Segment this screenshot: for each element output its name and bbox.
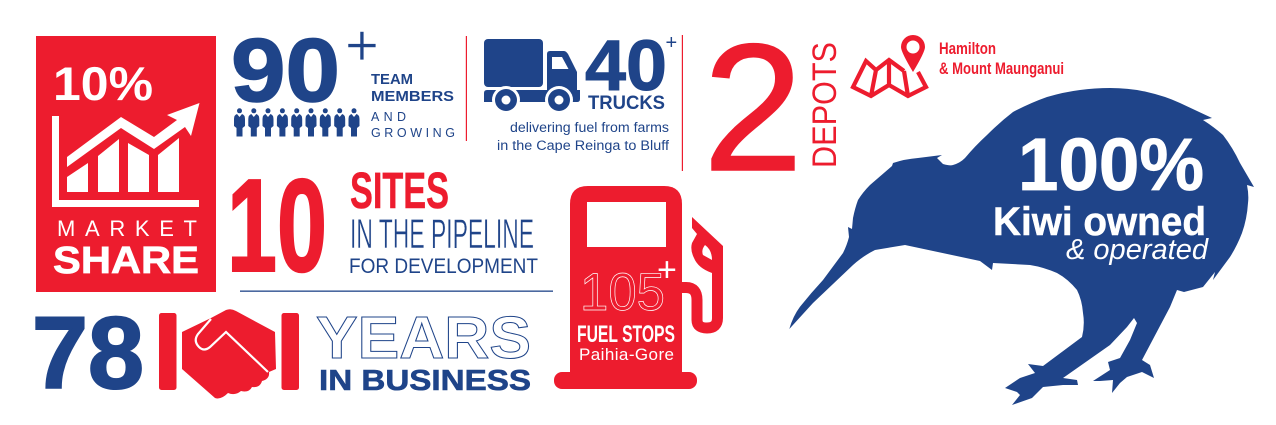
in business label: IN BUSINESS: [319, 365, 531, 397]
fuel stops label: FUEL STOPS: [577, 321, 675, 348]
panel: depots: [703, 7, 1064, 209]
ownership percentage: 100%: [1018, 123, 1204, 206]
icon: row of people: [234, 108, 360, 136]
for development label: FOR DEVELOPMENT: [349, 255, 538, 278]
icon: kiwi silhouette: [789, 88, 1254, 405]
plus sign: +: [345, 13, 379, 78]
icon: rising bar chart: [52, 103, 200, 207]
truck count: 40: [585, 27, 667, 106]
sites label: SITES: [350, 162, 449, 219]
team label: TEAM: [371, 71, 413, 88]
share label: SHARE: [53, 240, 199, 282]
icon: fuel pump: [554, 186, 723, 389]
depot location 1: Hamilton: [939, 39, 996, 58]
sites count: 10: [227, 152, 327, 299]
icon: truck: [484, 39, 580, 114]
delivery description line 1: delivering fuel from farms: [510, 120, 669, 135]
and label: AND: [371, 110, 406, 124]
years outline label: YEARS: [316, 305, 531, 371]
plus sign: +: [657, 251, 677, 289]
depot count: 2: [703, 7, 803, 209]
in the pipeline label: IN THE PIPELINE: [350, 210, 534, 257]
trucks label: TRUCKS: [588, 92, 665, 114]
panel: market share: [36, 36, 216, 292]
panel: fuel stops: [554, 186, 723, 389]
panel: years in business: [32, 296, 531, 410]
depots label: DEPOTS: [806, 42, 844, 168]
panel: trucks: [484, 27, 677, 153]
years count: 78: [32, 296, 144, 410]
icon: map with pin: [853, 35, 926, 96]
team count: 90: [231, 21, 340, 121]
growing label: GROWING: [371, 126, 455, 140]
kiwi owned label: Kiwi owned: [993, 200, 1206, 244]
delivery description line 2: in the Cape Reinga to Bluff: [497, 138, 669, 153]
market label: MARKET: [57, 216, 197, 241]
panel: sites in the pipeline: [227, 152, 538, 299]
red card background: [36, 36, 216, 292]
icon: handshake: [159, 309, 299, 398]
coverage label: Paihia-Gore: [579, 345, 674, 364]
fuel stop count: 105: [580, 263, 665, 322]
depot location 2: & Mount Maunganui: [939, 59, 1064, 78]
plus sign: +: [666, 32, 677, 54]
members label: MEMBERS: [371, 88, 454, 105]
market share percentage: 10%: [53, 57, 153, 110]
and operated label: & operated: [1066, 234, 1209, 266]
panel: team members: [231, 13, 455, 140]
panel: kiwi owned: [789, 88, 1254, 405]
